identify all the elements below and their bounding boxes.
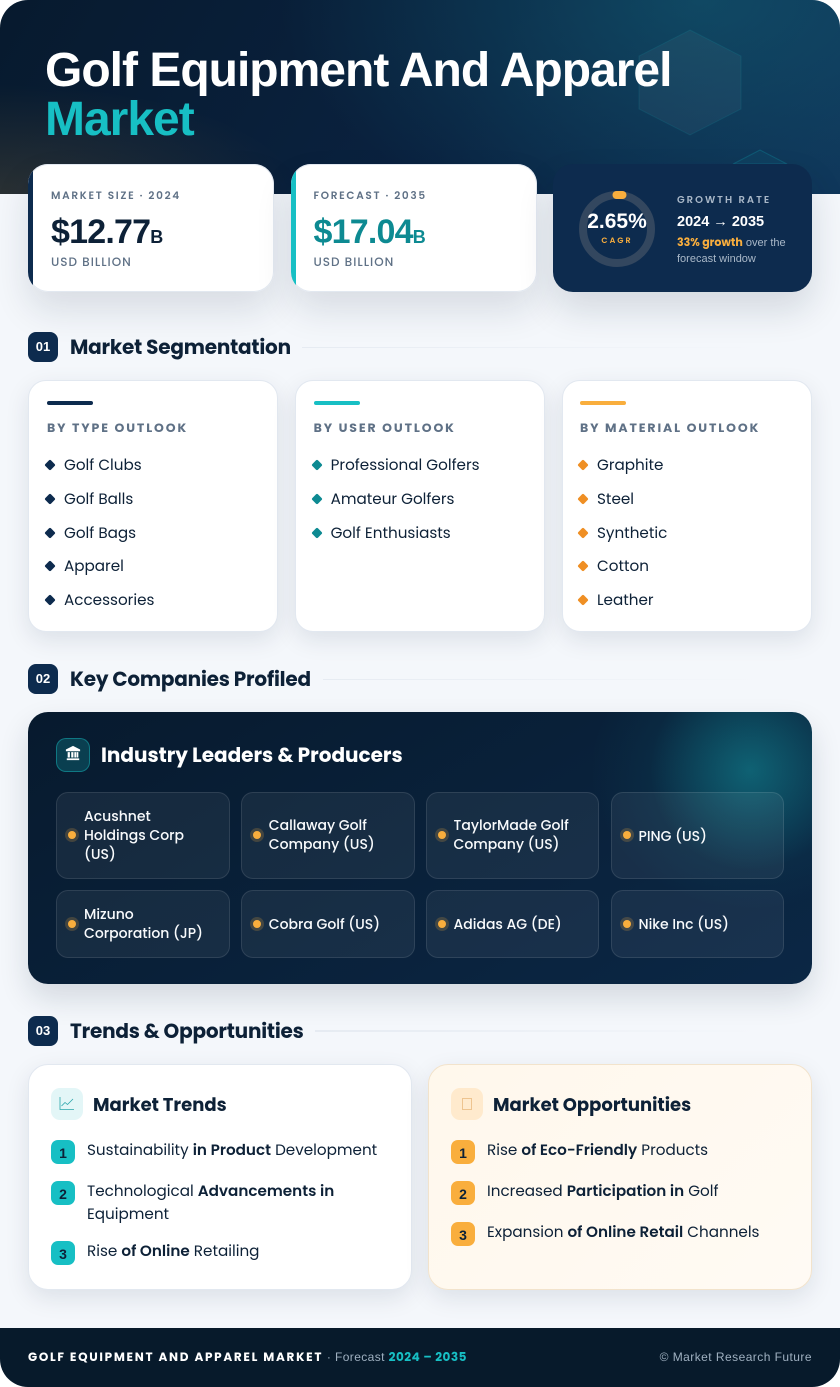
trend item: Sustainability in Product Development <box>87 1140 377 1161</box>
company card: Mizuno <box>84 904 134 924</box>
number 2: 2 <box>459 1186 467 1202</box>
company card: Acushnet <box>84 806 151 826</box>
panel: market opportunities <box>428 1064 812 1290</box>
company card <box>426 890 599 958</box>
company card <box>241 792 414 879</box>
opportunity item: Increased Participation in Golf <box>487 1181 718 1202</box>
list item: Golf Enthusiasts <box>331 523 451 544</box>
panel: by user outlook <box>295 380 545 632</box>
list item: Steel <box>597 489 634 510</box>
decorative hexagon <box>638 30 787 164</box>
stat value: $17.04B <box>314 213 425 251</box>
growth heading: GROWTH RATE <box>677 192 771 207</box>
company card: Holdings Corp <box>84 825 184 845</box>
company card: Company (US) <box>454 834 560 854</box>
growth note: 33% growth over the <box>677 234 786 250</box>
company card: Cobra Golf (US) <box>269 914 380 934</box>
opportunity item: Expansion of Online Retail Channels <box>487 1222 760 1243</box>
company card <box>610 890 784 958</box>
trend item <box>87 1181 334 1225</box>
stat label: FORECAST · 2035 <box>314 188 427 202</box>
trend item: Equipment <box>87 1204 169 1225</box>
list item: Amateur Golfers <box>331 489 454 510</box>
stat card: market size <box>28 164 274 292</box>
stat card: forecast <box>291 164 537 292</box>
footer right text: © Market Research Future <box>660 1350 812 1364</box>
CAGR value: 2.65% <box>587 210 647 233</box>
company card <box>241 890 414 958</box>
company card <box>426 792 599 879</box>
section heading: Trends & Opportunities <box>70 1016 304 1044</box>
list item: Golf Bags <box>64 523 136 544</box>
list item: Accessories <box>64 590 154 611</box>
section badge 03: 03 <box>36 1023 50 1038</box>
number 3 <box>451 1222 475 1246</box>
trend item: Technological Advancements in <box>87 1181 334 1202</box>
list item: Leather <box>597 590 654 611</box>
company card <box>56 890 230 958</box>
company card: Corporation (JP) <box>84 923 203 943</box>
company card: PING (US) <box>638 826 707 846</box>
growth note <box>677 234 786 264</box>
company card <box>56 792 230 879</box>
list item: Synthetic <box>597 523 667 544</box>
growth note: forecast window <box>677 252 756 264</box>
company card: Company (US) <box>269 834 375 854</box>
title: Golf Equipment And Apparel <box>45 44 671 97</box>
company card: Nike Inc (US) <box>638 914 729 934</box>
section badge 03 <box>28 1016 58 1046</box>
icon: missing glyph box <box>451 1088 483 1120</box>
footer <box>0 1328 840 1387</box>
opportunity item: Rise of Eco-Friendly Products <box>487 1140 708 1161</box>
number 3: 3 <box>59 1246 67 1262</box>
stat unit: USD BILLION <box>314 254 394 271</box>
number 3 <box>51 1241 75 1265</box>
panel heading: BY TYPE OUTLOOK <box>47 420 188 436</box>
panel heading: Market Trends <box>93 1092 227 1118</box>
panel: by type outlook <box>28 380 278 632</box>
stat label: MARKET SIZE · 2024 <box>51 188 181 202</box>
section badge 02: 02 <box>36 671 50 686</box>
section badge 02 <box>28 664 58 694</box>
section heading: Key Companies Profiled <box>70 665 311 693</box>
number 1 <box>451 1140 475 1164</box>
panel: by material outlook <box>562 380 812 632</box>
company card: TaylorMade Golf <box>454 815 569 835</box>
stat value: $12.77B <box>51 213 162 251</box>
stat card: growth rate <box>553 164 812 292</box>
panel: key companies <box>28 712 812 984</box>
section heading: Market Segmentation <box>70 333 291 361</box>
list item: Apparel <box>64 556 124 577</box>
header band <box>0 0 840 194</box>
company card: (US) <box>84 844 116 864</box>
list item: Golf Balls <box>64 489 133 510</box>
icon: chart <box>51 1088 83 1120</box>
section badge 01 <box>28 332 58 362</box>
number 1: 1 <box>459 1145 467 1161</box>
CAGR label: CAGR <box>601 235 633 246</box>
company card: Adidas AG (DE) <box>454 914 562 934</box>
list item: Professional Golfers <box>331 455 480 476</box>
icon: institution <box>56 738 90 772</box>
panel heading: Industry Leaders & Producers <box>101 741 403 769</box>
company card: Callaway Golf <box>269 815 367 835</box>
growth years: 2024 → 2035 <box>677 214 764 230</box>
number 2: 2 <box>59 1186 67 1202</box>
panel heading: BY MATERIAL OUTLOOK <box>580 420 760 436</box>
panel heading: BY USER OUTLOOK <box>314 420 456 436</box>
title <box>45 44 671 146</box>
number 3: 3 <box>459 1227 467 1243</box>
list item: Golf Clubs <box>64 455 142 476</box>
stat unit: USD BILLION <box>51 254 132 271</box>
panel heading: Market Opportunities <box>493 1092 691 1118</box>
CAGR ring <box>579 191 655 267</box>
company card <box>610 792 784 879</box>
list item: Graphite <box>597 455 663 476</box>
number 1 <box>51 1140 75 1164</box>
number 2 <box>451 1181 475 1205</box>
trend item: Rise of Online Retailing <box>87 1241 259 1262</box>
panel: market trends <box>28 1064 412 1290</box>
number 2 <box>51 1181 75 1205</box>
section badge 01: 01 <box>36 339 50 354</box>
list item: Cotton <box>597 556 649 577</box>
number 1: 1 <box>59 1145 67 1161</box>
title: Market <box>45 93 194 146</box>
footer left text: GOLF EQUIPMENT AND APPAREL MARKET · Forecast 2024 – 2035 <box>28 1349 467 1366</box>
